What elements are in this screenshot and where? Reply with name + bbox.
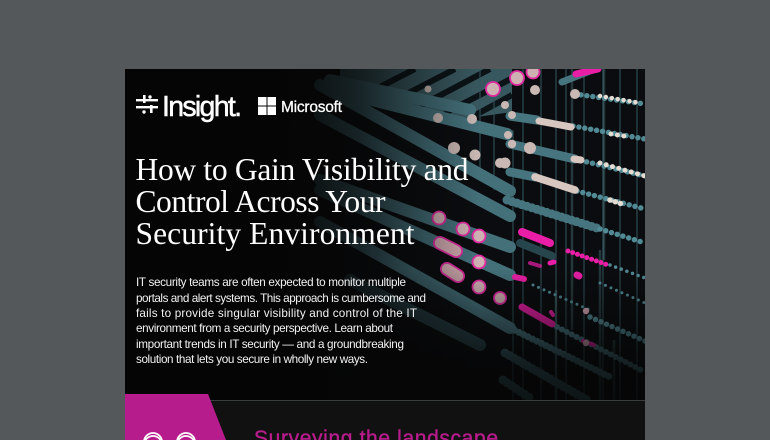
intro text block: portals and alert systems. This approach is cumbersome and xyxy=(136,292,426,305)
title: How to Gain Visibility and xyxy=(136,152,469,187)
panel: magenta tab xyxy=(125,394,226,440)
right side beaded trails xyxy=(503,71,645,400)
icon: Microsoft squares xyxy=(258,97,276,115)
magenta ringed pills xyxy=(440,243,458,276)
title: Security Environment xyxy=(136,216,415,251)
wordmark: Insight: Insight. xyxy=(162,91,242,123)
logo: Insight xyxy=(136,91,242,123)
left darkening overlay xyxy=(125,69,472,332)
thick teal light trails xyxy=(320,80,510,345)
magenta ringed dots xyxy=(432,66,540,304)
panel: lower dark section xyxy=(125,400,645,440)
wordmark: Microsoft: Microsoft xyxy=(281,99,343,116)
pale dots xyxy=(424,85,580,168)
title: Control Across Your xyxy=(136,184,386,219)
icon: two shields xyxy=(144,433,195,440)
icon: Insight mark xyxy=(136,95,158,114)
intro text block: fails to provide singular visibility and control of the IT xyxy=(136,307,417,320)
panel: hero image xyxy=(125,66,645,401)
bottom darkening overlay xyxy=(382,272,645,400)
logo: Microsoft xyxy=(258,97,343,116)
small pale highlights in magenta xyxy=(583,308,589,346)
title xyxy=(136,152,469,251)
intro text block: solution that lets you secure in wholly new ways. xyxy=(136,353,368,366)
intro text block: environment from a security perspective. Learn about xyxy=(136,322,394,335)
intro text block xyxy=(136,276,426,366)
intro text block: important trends in IT security — and a groundbreaking xyxy=(136,338,404,351)
pale pills xyxy=(535,96,645,204)
hot magenta streaks xyxy=(515,69,608,345)
intro text block: IT security teams are often expected to monitor multiple xyxy=(136,276,406,289)
